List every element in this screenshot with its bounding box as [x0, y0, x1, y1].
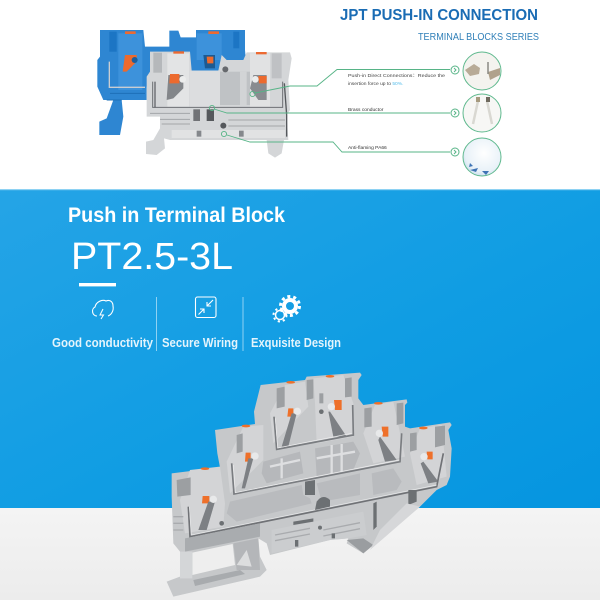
- windows: [262, 442, 360, 483]
- icon: inward arrows box: [196, 297, 216, 318]
- blue terminal block behind: [97, 30, 246, 135]
- product photo: PT2.5-3L three-level terminal block: [167, 373, 452, 597]
- slots: [177, 377, 445, 497]
- subtitle: TERMINAL BLOCKS SERIES: [418, 31, 539, 43]
- callout text: brass conductor: Brass conductor: [348, 107, 384, 113]
- photo circle: brass conductor: [463, 94, 501, 132]
- label: exquisite design: Exquisite Design: [251, 336, 341, 350]
- icon: arrow bullet 3: [451, 148, 459, 156]
- panel: top white product section: [0, 0, 600, 189]
- leader line: anti-flaming PA66: [221, 131, 450, 152]
- label: secure wiring: Secure Wiring: [162, 336, 238, 350]
- panel: blue feature section background: [0, 189, 600, 509]
- pivots: [210, 403, 428, 503]
- callout text: anti-flaming: Anti-flaming PA66: [348, 145, 387, 151]
- foot rail: [180, 503, 420, 586]
- light faces: [180, 375, 447, 533]
- block body: [167, 373, 452, 597]
- callout text: push-in direct connections: insertion force up to 50%.: [348, 81, 403, 87]
- divider left: [156, 297, 157, 351]
- clamps: [198, 412, 438, 530]
- metal bridges: [188, 405, 443, 537]
- callout text: push-in direct connections: Push-in Direct Connections：Reduce the: [348, 73, 445, 79]
- callout text: push-in direct connections: [348, 73, 445, 87]
- holes and rib details: [219, 409, 417, 547]
- frame opening in the foot rail: [192, 544, 235, 575]
- orange push buttons: [201, 375, 433, 503]
- leader line: brass conductor: [209, 105, 450, 113]
- divider right: [242, 297, 244, 351]
- icon: cloud with lightning: [93, 300, 113, 319]
- product photo: two-piece push-in terminal block: [97, 30, 292, 158]
- heading: model number: PT2.5-3L: [71, 236, 233, 278]
- lower body panel with moulded ribs: [173, 512, 367, 553]
- title: JPT PUSH-IN CONNECTION: [340, 7, 538, 24]
- photo circle: push-in clamp: [463, 52, 501, 90]
- accent underline: [79, 283, 116, 286]
- icon: arrow bullet 2: [451, 109, 459, 117]
- lower oval recesses: [227, 468, 402, 522]
- leader line: push-in connection: [250, 70, 450, 97]
- icon: gears: [274, 296, 300, 322]
- icon: arrow bullet 1: [451, 66, 459, 74]
- label: good conductivity: Good conductivity: [52, 336, 153, 350]
- panel: light grey floor: [0, 508, 600, 600]
- photo circle: PA66 pellets: [463, 138, 501, 176]
- grey terminal block in front: [146, 51, 292, 158]
- heading: Push in Terminal Block: Push in Terminal Block: [68, 204, 285, 227]
